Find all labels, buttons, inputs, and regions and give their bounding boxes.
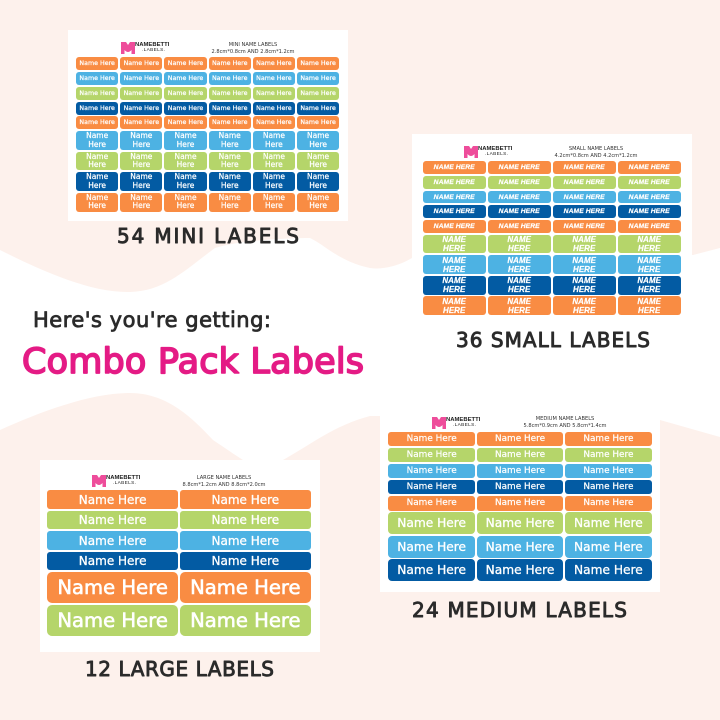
mini label grid: Here (177, 160, 194, 169)
small label grid: HERE (508, 265, 530, 274)
logo: mini sheet (121, 42, 169, 54)
large label grid: Name Here (211, 554, 279, 568)
mini label grid: Here (265, 140, 283, 149)
mini label grid: Here (132, 160, 150, 169)
medium label grid: Name Here (397, 563, 466, 577)
small label grid: NAME (572, 276, 596, 285)
intro line: Here's you're getting: (33, 308, 271, 332)
mini label grid: Here (265, 201, 283, 210)
mini label grid: Name (219, 193, 241, 202)
medium label grid (388, 432, 652, 581)
small label grid: HERE (573, 244, 595, 253)
small sheet heading: 4.2cm*0.8cm AND 4.2cm*1.2cm (554, 152, 638, 158)
mini label grid: Here (88, 201, 106, 210)
mini label grid: Name (130, 152, 152, 161)
small label grid: HERE (638, 244, 660, 253)
small label grid: NAME HERE (564, 164, 605, 171)
medium label grid: Name Here (495, 466, 545, 476)
small label grid: HERE (573, 306, 595, 315)
small label grid: NAME HERE (499, 223, 540, 230)
large label grid (47, 490, 311, 636)
small label grid: NAME (637, 276, 661, 285)
mini label grid: Name (130, 172, 152, 181)
large label grid: Name Here (79, 513, 146, 527)
mini label grid: Name (174, 152, 197, 161)
small label grid: NAME HERE (564, 179, 605, 186)
mini label grid: Here (265, 181, 283, 190)
small label grid: HERE (573, 285, 595, 294)
mini label grid: Name (174, 172, 197, 181)
logo: mini sheet: NAMEBETTI (135, 42, 169, 48)
mini label grid: Name Here (168, 60, 203, 67)
small label grid: HERE (443, 265, 465, 274)
caption: 36 small labels: 36 SMALL LABELS (456, 328, 650, 352)
mini label grid: Name (263, 193, 285, 202)
large sheet heading: 8.8cm*1.2cm AND 8.8cm*2.0cm (182, 482, 266, 488)
mini sheet heading: 2.8cm*0.8cm AND 2.8cm*1.2cm (211, 48, 294, 54)
small label grid: HERE (638, 306, 660, 315)
logo: medium sheet: NAMEBETTI (446, 416, 480, 422)
small label grid: NAME HERE (629, 194, 670, 201)
mini label grid: Name (174, 131, 197, 140)
mini label grid: Here (88, 140, 106, 149)
medium sheet heading (523, 416, 606, 428)
mini label grid: Name (219, 131, 241, 140)
mini label grid (76, 57, 339, 212)
medium label grid: Name Here (486, 563, 554, 577)
medium sheet heading: MEDIUM NAME LABELS (536, 416, 594, 422)
mini label grid: Here (177, 181, 194, 190)
mini label grid: Name (174, 193, 197, 202)
caption: 12 large labels: 12 LARGE LABELS (85, 657, 274, 681)
mini label grid: Here (221, 140, 239, 149)
mini label grid: Here (309, 181, 327, 190)
small label grid: NAME HERE (564, 194, 605, 201)
title: Combo Pack Labels (22, 342, 364, 382)
mini label grid: Name (307, 172, 329, 181)
mini label grid: Name (263, 152, 285, 161)
caption: 24 medium labels: 24 MEDIUM LABELS (412, 598, 627, 622)
mini label grid: Name Here (79, 105, 115, 112)
small sheet heading: SMALL NAME LABELS (569, 146, 623, 152)
mini label grid: Here (309, 201, 327, 210)
large label grid: Name Here (211, 513, 279, 527)
medium label grid: Name Here (583, 498, 633, 508)
small label grid: NAME HERE (434, 164, 475, 171)
large label grid: Name Here (57, 576, 168, 599)
mini label grid: Name Here (256, 105, 292, 112)
mini label grid: Name Here (300, 105, 336, 112)
mini label grid: Name (86, 172, 108, 181)
mini label grid: Here (88, 160, 106, 169)
medium label grid: Name Here (583, 434, 633, 444)
small label grid: HERE (443, 285, 465, 294)
small label grid: NAME HERE (564, 208, 605, 215)
small label grid: NAME HERE (629, 208, 670, 215)
mini label grid: Here (177, 201, 194, 210)
small label grid: NAME (572, 256, 596, 265)
mini label grid: Name Here (79, 119, 115, 126)
large label grid: Name Here (211, 493, 279, 507)
mini label grid: Name (263, 172, 285, 181)
mini sheet heading (211, 42, 294, 54)
mini label grid: Here (88, 181, 106, 190)
mini label grid: Name Here (300, 75, 336, 82)
mini label grid: Name Here (212, 60, 247, 67)
medium label grid: Name Here (407, 482, 457, 492)
large label grid: Name Here (79, 534, 146, 548)
small label grid: NAME HERE (564, 223, 605, 230)
logo: small sheet: .LABELS. (485, 152, 508, 157)
medium label grid: Name Here (486, 540, 554, 554)
large label grid: Name Here (211, 534, 279, 548)
small label grid: NAME (637, 256, 661, 265)
mini label grid: Here (177, 140, 194, 149)
medium label grid: Name Here (495, 498, 545, 508)
small label grid: NAME (507, 297, 531, 306)
large label grid: Name Here (190, 576, 301, 599)
mini label grid: Name (219, 172, 241, 181)
panel: small labels (412, 134, 692, 322)
medium label grid: Name Here (583, 466, 633, 476)
small label grid: NAME HERE (499, 164, 540, 171)
panel: mini labels (68, 30, 348, 221)
mini label grid: Name Here (212, 75, 247, 82)
mini label grid: Name Here (256, 90, 292, 97)
small label grid: HERE (638, 285, 660, 294)
medium sheet heading: 5.8cm*0.9cm AND 5.8cm*1.4cm (523, 422, 606, 428)
small label grid: NAME (637, 297, 661, 306)
medium label grid: Name Here (495, 434, 545, 444)
mini label grid: Name Here (79, 90, 115, 97)
medium label grid: Name Here (574, 563, 643, 577)
mini label grid: Name (219, 152, 241, 161)
mini label grid: Name Here (300, 60, 336, 67)
small label grid: NAME (442, 256, 466, 265)
mini label grid: Here (221, 160, 239, 169)
mini label grid: Name Here (168, 75, 203, 82)
small label grid (423, 161, 681, 315)
medium label grid: Name Here (574, 516, 643, 530)
mini label grid: Name Here (79, 75, 115, 82)
small label grid: NAME HERE (629, 164, 670, 171)
mini label grid: Name (86, 152, 108, 161)
mini label grid: Here (132, 201, 150, 210)
mini label grid: Name Here (124, 60, 159, 67)
small label grid: NAME (637, 235, 661, 244)
small label grid: HERE (508, 306, 530, 315)
logo: small sheet (464, 146, 512, 158)
mini label grid: Name Here (256, 119, 292, 126)
small label grid: NAME HERE (434, 208, 475, 215)
large sheet heading (182, 475, 266, 488)
mini label grid: Name (130, 131, 152, 140)
small label grid: NAME (572, 235, 596, 244)
mini label grid: Name (130, 193, 152, 202)
mini label grid: Name (307, 131, 329, 140)
medium label grid: Name Here (407, 466, 457, 476)
logo: large sheet: NAMEBETTI (106, 475, 140, 481)
mini label grid: Name Here (168, 90, 203, 97)
mini label grid: Name Here (124, 105, 159, 112)
mini label grid: Here (221, 181, 239, 190)
mini label grid: Name Here (256, 75, 292, 82)
mini label grid: Name Here (212, 90, 247, 97)
small sheet heading (554, 146, 638, 158)
logo: large sheet: .LABELS. (113, 481, 136, 486)
mini label grid: Name Here (79, 60, 115, 67)
mini label grid: Name (86, 131, 108, 140)
large sheet heading: LARGE NAME LABELS (197, 475, 251, 481)
small label grid: HERE (508, 285, 530, 294)
mini label grid: Here (132, 181, 150, 190)
mini label grid: Here (265, 160, 283, 169)
medium label grid: Name Here (495, 450, 545, 460)
panel: large labels (40, 460, 320, 652)
medium label grid: Name Here (407, 450, 457, 460)
mini label grid: Name (263, 131, 285, 140)
small label grid: NAME (442, 235, 466, 244)
small label grid: HERE (638, 265, 660, 274)
mini label grid: Name (307, 152, 329, 161)
medium label grid: Name Here (574, 540, 643, 554)
medium label grid: Name Here (583, 450, 633, 460)
mini label grid: Here (221, 201, 239, 210)
mini label grid: Name (307, 193, 329, 202)
small label grid: NAME (442, 276, 466, 285)
small label grid: NAME (507, 276, 531, 285)
small label grid: NAME HERE (434, 194, 475, 201)
mini label grid: Name Here (168, 119, 203, 126)
mini label grid: Name (86, 193, 108, 202)
medium label grid: Name Here (407, 498, 457, 508)
medium label grid: Name Here (397, 540, 466, 554)
mini label grid: Name Here (168, 105, 203, 112)
medium label grid: Name Here (407, 434, 457, 444)
logo: medium sheet (432, 416, 480, 429)
small label grid: NAME HERE (434, 223, 475, 230)
mini label grid: Name Here (212, 119, 247, 126)
small label grid: NAME HERE (629, 179, 670, 186)
small label grid: NAME (507, 256, 531, 265)
small label grid: NAME HERE (499, 208, 540, 215)
large label grid: Name Here (57, 609, 168, 632)
small label grid: HERE (508, 244, 530, 253)
small label grid: NAME HERE (499, 194, 540, 201)
small label grid: HERE (573, 265, 595, 274)
mini label grid: Name Here (256, 60, 292, 67)
small label grid: NAME HERE (499, 179, 540, 186)
small label grid: HERE (443, 244, 465, 253)
logo: large sheet (92, 475, 140, 487)
logo: medium sheet: .LABELS. (453, 422, 476, 428)
large label grid: Name Here (190, 609, 301, 632)
large label grid: Name Here (79, 554, 146, 568)
small label grid: HERE (443, 306, 465, 315)
mini label grid: Name Here (300, 119, 336, 126)
small label grid: NAME HERE (434, 179, 475, 186)
mini label grid: Name Here (124, 75, 159, 82)
mini sheet heading: MINI NAME LABELS (229, 42, 277, 48)
medium label grid: Name Here (397, 516, 466, 530)
mini label grid: Name Here (300, 90, 336, 97)
large label grid: Name Here (79, 493, 146, 507)
mini label grid: Here (309, 160, 327, 169)
mini label grid: Name Here (212, 105, 247, 112)
mini label grid: Name Here (124, 90, 159, 97)
caption: 54 mini labels: 54 MINI LABELS (117, 224, 299, 248)
medium label grid: Name Here (486, 516, 554, 530)
mini label grid: Here (309, 140, 327, 149)
medium label grid: Name Here (583, 482, 633, 492)
logo: small sheet: NAMEBETTI (478, 146, 512, 152)
mini label grid: Here (132, 140, 150, 149)
medium label grid: Name Here (495, 482, 545, 492)
small label grid: NAME HERE (629, 223, 670, 230)
small label grid: NAME (442, 297, 466, 306)
small label grid: NAME (507, 235, 531, 244)
logo: mini sheet: .LABELS. (142, 48, 165, 53)
panel: medium labels (380, 416, 660, 592)
small label grid: NAME (572, 297, 596, 306)
mini label grid: Name Here (124, 119, 159, 126)
